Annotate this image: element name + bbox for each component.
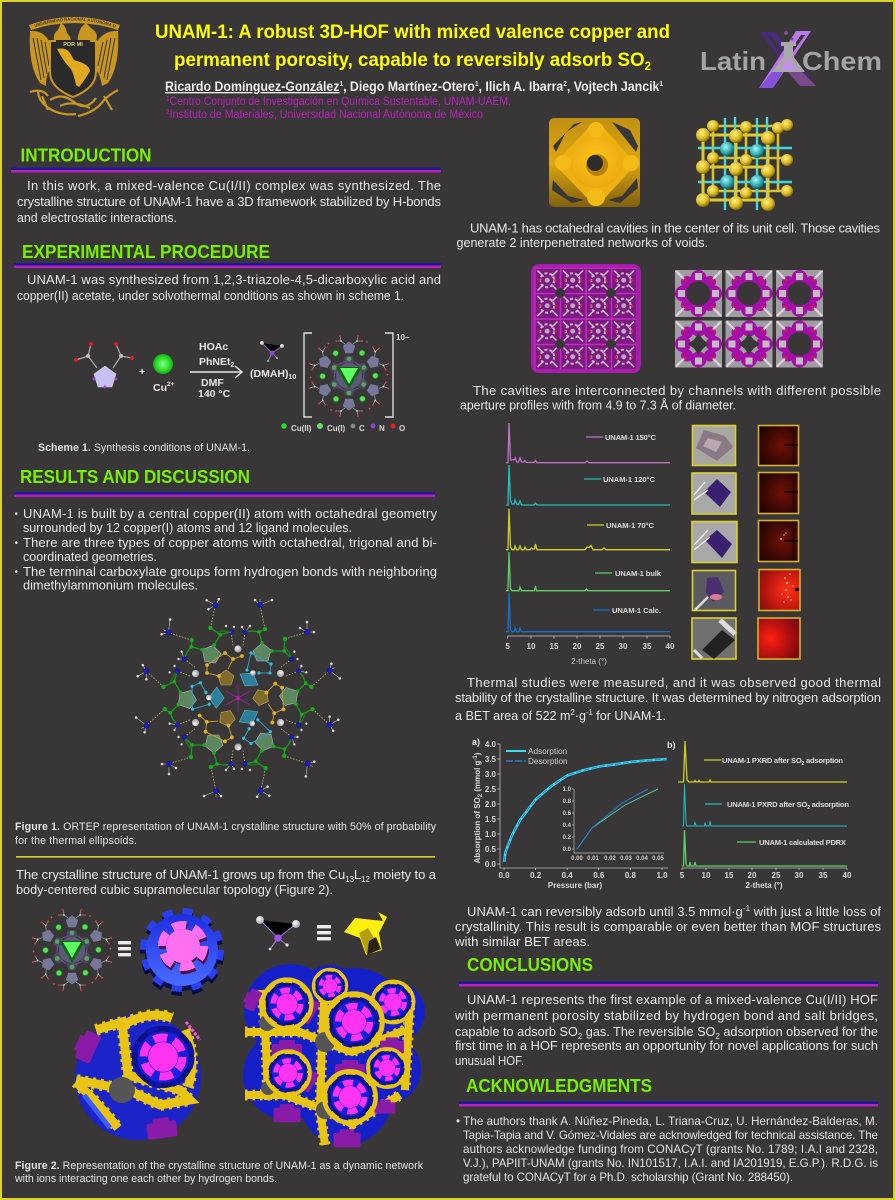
- heading: results: RESULTS AND DISCUSSION: [20, 467, 250, 487]
- arrow with conditions: 140 °C: [198, 388, 231, 400]
- text: thermal studies: a BET area of 522 m: [455, 708, 575, 723]
- axes: 0.0: [485, 860, 497, 869]
- inset chart: 0.6: [563, 811, 572, 817]
- x axis: 2-theta (°): [571, 657, 607, 666]
- axes: 0.5: [485, 845, 497, 854]
- figure 2: [27, 909, 425, 1147]
- axes: 0.6: [593, 871, 605, 880]
- text: thermal studies: Thermal studies were measured, and it was observed good thermal: [467, 675, 881, 690]
- icon: blue gear: [145, 913, 219, 991]
- axes: 0.4: [562, 871, 573, 880]
- x axis: 10: [527, 642, 536, 651]
- authors: 1: [475, 81, 479, 88]
- authors: 1: [340, 81, 343, 88]
- label: Cu2+: 2+: [167, 381, 175, 388]
- axes: 2.5: [485, 785, 497, 794]
- images: diffraction frames: [758, 426, 800, 659]
- inset chart: 0.0: [563, 847, 572, 853]
- scheme 1: [74, 333, 410, 433]
- text: thermal studies: stability of the crystalline structure. It was determined by nitrogen adsorption: [455, 690, 881, 705]
- text: introduction: [17, 178, 442, 225]
- chart a: SO2 adsorption isotherm: [472, 737, 668, 890]
- text: topology: 12: [361, 875, 370, 884]
- title: permanent porosity, capable to reversibly adsorb SO: [174, 49, 663, 71]
- text: results bullets: The terminal carboxylate groups form hydrogen bonds with neighboring: [23, 564, 437, 579]
- text: conclusions: 2: [715, 1032, 720, 1041]
- text: experimental: UNAM-1 was synthesized from 1,2,3-triazole-4,5-dicarboxylic acid and: [27, 272, 441, 287]
- axis: 10: [702, 871, 711, 880]
- axes: 3.5: [485, 755, 497, 764]
- x axis: 40: [666, 642, 675, 651]
- text: reversible adsorption: with similar BET areas.: [454, 934, 590, 949]
- text: reversible adsorption: [454, 904, 882, 949]
- text: results bullets: There are three types of copper atoms with octahedral, trigonal and bi-: [23, 535, 437, 550]
- caption: scheme 1: Scheme 1. Synthesis conditions of UNAM-1.: [38, 442, 250, 454]
- text: acknowledgments: • The authors thank A. Núñez-Pineda, L. Triana-Cruz, U. Hernández-Balderas, M.: [456, 1115, 878, 1128]
- inset chart: [563, 787, 664, 862]
- text: acknowledgments: [456, 1115, 878, 1184]
- caption: figure 1: Figure 1. ORTEP representation of UNAM-1 crystalline structure with 50% of probability: [15, 821, 437, 833]
- image: interpenetrated lattice: [696, 117, 793, 211]
- axis: [680, 868, 852, 890]
- axes: 0.2: [530, 871, 542, 880]
- axes: [473, 740, 668, 890]
- legend: adsorption: Desorption: [528, 757, 568, 766]
- axes: 1.5: [485, 815, 497, 824]
- axes: Absorption of SO: [473, 797, 482, 863]
- rule: [459, 982, 878, 986]
- 3D sphere of gears: [71, 1014, 201, 1140]
- text: channels: aperture profiles with from 4.9 to 7.3 Å of diameter.: [460, 398, 736, 412]
- icon: DMAH molecule: [256, 916, 300, 950]
- axes: 2: [478, 793, 484, 797]
- text: results bullets: •: [14, 567, 18, 578]
- affiliations: 2: [166, 109, 170, 116]
- text: cavities: [456, 220, 880, 250]
- text: acknowledgments: grateful to CONACyT for a Ph.D. scholarship (Grant No. 288450).: [463, 1171, 793, 1184]
- x axis: [505, 636, 675, 666]
- rule: [14, 263, 441, 268]
- title: UNAM-1: A robust 3D-HOF with mixed valence copper and: [155, 21, 670, 43]
- text: thermal studies: for UNAM-1.: [593, 708, 666, 723]
- logo: LatinXChem: [700, 31, 882, 88]
- legend: UNAM-1 PXRD after SO: [722, 756, 802, 765]
- rule: [459, 1102, 878, 1106]
- plus sign: +: [139, 366, 145, 378]
- text: results bullets: UNAM-1 is built by a central copper(II) atom with octahedral geometry: [23, 506, 438, 521]
- text: conclusions: gas. The reversible SO: [582, 1024, 715, 1039]
- image: channels in grey tiles: [675, 270, 823, 368]
- text: channels: The cavities are interconnected by channels with different possible: [473, 383, 881, 398]
- panel: conclusions: [454, 955, 878, 1068]
- x axis: 30: [619, 642, 628, 651]
- text: thermal studies: ·g: [575, 708, 586, 723]
- affiliations: 1: [166, 96, 170, 103]
- chart b: PXRD after SO2: [667, 740, 852, 890]
- caption: figure 1: [15, 821, 437, 847]
- authors: 1: [659, 81, 663, 88]
- rule: [14, 492, 435, 497]
- axes: (mmol g: [473, 760, 482, 794]
- legend: adsorption: Adsorption: [528, 747, 568, 756]
- logo: UNAM shield: POR MI: [63, 42, 83, 48]
- text: conclusions: capable to adsorb SO: [455, 1024, 581, 1039]
- authors: , Ilich A. Ibarra: [479, 79, 564, 94]
- text: results bullets: surrounded by 12 copper(I) atoms and 12 ligand molecules.: [23, 520, 352, 535]
- inset chart: 0.2: [563, 835, 572, 841]
- authors: 2: [563, 81, 567, 88]
- text: conclusions: adsorption observed for the: [720, 1024, 878, 1039]
- heading: conclusions: CONCLUSIONS: [467, 955, 593, 975]
- text: topology: 13: [345, 875, 354, 884]
- panel label a: a): [472, 737, 480, 747]
- x axis: 5: [505, 642, 510, 651]
- text: acknowledgments: authors acknowledge funding from CONACyT (grants No. 1789; I.A.I and 2328,: [463, 1143, 878, 1156]
- figure 1: ORTEP structure: [113, 581, 363, 815]
- inset chart: 0.02: [604, 856, 616, 862]
- axis: 40: [843, 871, 852, 880]
- bracketed cluster: 10−: [396, 333, 410, 342]
- x axis: 25: [596, 642, 605, 651]
- text: results bullets: coordinated geometries.: [23, 549, 157, 564]
- panel label b: b): [667, 740, 676, 750]
- legend: O: [399, 424, 405, 433]
- legend: N: [379, 424, 385, 433]
- text: conclusions: UNAM-1 represents the first example of a mixed-valence Cu(I/II) HOF: [467, 992, 878, 1007]
- text: topology: body-centered cubic supramolecular topology (Figure 2).: [16, 882, 333, 897]
- equals sign: [317, 925, 331, 940]
- images: crystal photographs: [692, 426, 737, 659]
- arrow with conditions: HOAc: [199, 341, 228, 353]
- logo: UNAM shield: [29, 17, 120, 118]
- axes: 4.0: [485, 740, 497, 749]
- axes: 3.0: [485, 770, 497, 779]
- text: cavities: UNAM-1 has octahedral cavities in the center of its unit cell. Those cavities: [470, 220, 880, 236]
- text: reversible adsorption: -1: [743, 904, 751, 913]
- heading: experimental procedure: EXPERIMENTAL PROCEDURE: [22, 242, 270, 262]
- legend: adsorption: [810, 800, 849, 809]
- legend: adsorption: [506, 747, 568, 766]
- axis: 30: [795, 871, 804, 880]
- text: conclusions: first time in a HOF represents an opportunity for novel applications for such: [455, 1038, 878, 1053]
- affiliations: Centro Conjunto de Investigación en Química Sustentable, UNAM-UAEM.: [170, 96, 511, 108]
- chart: PXRD thermal series: [505, 423, 675, 666]
- label: Cu2+: Cu: [153, 382, 167, 394]
- text: introduction: and electrostatic interactions.: [17, 210, 177, 225]
- icon: yellow tripod: [344, 912, 387, 955]
- axes: 0.8: [625, 871, 637, 880]
- icon: triazole ligand: [74, 342, 134, 388]
- axes: 0.0: [498, 871, 510, 880]
- inset chart: 0.8: [563, 799, 572, 805]
- legend: temperatures: [584, 433, 662, 615]
- panel: acknowledgments: [456, 1076, 878, 1184]
- logo: LatinXChem: Chem: [802, 46, 882, 76]
- axis: 20: [748, 871, 757, 880]
- caption: figure 2: [14, 1160, 424, 1185]
- text: experimental: [17, 272, 441, 303]
- legend: Cu(II): [291, 424, 312, 433]
- text: acknowledgments: V.J.), PAPIIT-UNAM (grants No. IN101517, I.A.I. and IA201919, E.G.P.). R.D.G. is: [463, 1157, 878, 1170]
- authors: , Vojtech Jancik: [567, 79, 660, 94]
- legend: adsorption: [804, 756, 843, 765]
- axis: 35: [819, 871, 828, 880]
- axes: 1.0: [485, 830, 497, 839]
- x axis: 20: [573, 642, 582, 651]
- bracketed cluster: [304, 333, 410, 417]
- text: reversible adsorption: with just a little loss of: [750, 904, 881, 919]
- text: introduction: crystalline structure of UNAM-1 have a 3D framework stabilized by H-bonds: [17, 194, 442, 209]
- inset chart: 1.0: [563, 787, 572, 793]
- inset chart: 0.01: [587, 856, 599, 862]
- legend: Cu(I): [327, 424, 346, 433]
- authors: , Diego Martínez-Otero: [343, 79, 475, 94]
- caption: figure 2: Figure 2. Representation of the crystalline structure of UNAM-1 as a dynamic network: [15, 1160, 424, 1172]
- panel: experimental procedure: [14, 242, 441, 454]
- authors: Ricardo Domínguez-González: [165, 79, 340, 94]
- label: DMAH: (DMAH): [250, 368, 288, 380]
- arrow with conditions: DMF: [201, 377, 224, 389]
- divider: [16, 856, 435, 858]
- panel: results and discussion: [14, 467, 438, 1185]
- text: conclusions: [454, 992, 878, 1068]
- axis: 2-theta (°): [746, 881, 783, 890]
- x axis: 15: [550, 642, 559, 651]
- inset chart: 0.04: [636, 856, 648, 862]
- panel: introduction: [11, 146, 442, 225]
- text: introduction: In this work, a mixed-valence Cu(I/II) complex was synthesized. The: [27, 178, 441, 193]
- legend: temperatures: UNAM-1 150°C: [605, 433, 657, 442]
- text: topology: The crystalline structure of UNAM-1 grows up from the Cu: [16, 867, 345, 882]
- axes: -1: [473, 755, 479, 761]
- axis: 5: [680, 871, 685, 880]
- header: [29, 17, 882, 121]
- inset chart: 0.4: [563, 823, 572, 829]
- legend: temperatures: UNAM-1 Calc.: [612, 606, 661, 615]
- legend: 2: [802, 761, 805, 767]
- equals sign: [118, 941, 131, 956]
- text: topology: [16, 867, 437, 897]
- text: conclusions: 2: [578, 1032, 583, 1041]
- legend: 2: [807, 805, 810, 811]
- text: cavities: generate 2 interpenetrated networks of voids.: [456, 235, 708, 250]
- axis: 25: [772, 871, 781, 880]
- title: [155, 21, 670, 73]
- text: results bullets: [14, 506, 438, 592]
- legend: UNAM-1 calculated PDRX: [759, 838, 846, 847]
- text: reversible adsorption: crystallinity. This result is comparable or even better than MOF structures: [455, 919, 882, 934]
- text: results bullets: •: [14, 509, 18, 520]
- text: results bullets: •: [14, 538, 18, 549]
- legend: [281, 423, 405, 433]
- inset chart: 0.05: [652, 856, 664, 862]
- legend: [704, 756, 849, 847]
- image: magenta network: [531, 264, 641, 373]
- axes: 2.0: [485, 800, 497, 809]
- text: topology: moiety to a: [370, 867, 437, 882]
- arrow with conditions: [190, 341, 242, 400]
- legend: C: [359, 424, 365, 433]
- text: experimental: copper(II) acetate, under solvothermal conditions as shown in scheme 1.: [17, 288, 404, 303]
- text: thermal studies: -1: [586, 708, 593, 717]
- label: DMAH: 10: [288, 374, 296, 381]
- legend: temperatures: UNAM-1 70°C: [606, 521, 655, 530]
- icon: cluster small: [27, 909, 117, 991]
- text: channels: [460, 383, 881, 412]
- axes: ): [473, 752, 482, 755]
- text: acknowledgments: Tapia-Tapia and V. Gómez-Vidales are acknowledged for technical assistance. The: [463, 1129, 878, 1142]
- rule: [11, 168, 441, 172]
- legend: UNAM-1 PXRD after SO: [727, 800, 807, 809]
- panel: right column: [454, 117, 882, 1184]
- arrow with conditions: 2: [230, 362, 234, 369]
- text: topology: L: [354, 867, 361, 882]
- text: conclusions: with permanent porosity stabilized by hydrogen bond and salt bridges,: [454, 1008, 878, 1023]
- affiliations: [166, 96, 511, 121]
- axis: 15: [725, 871, 734, 880]
- text: thermal studies: [455, 675, 881, 723]
- arrow with conditions: PhNEt: [199, 356, 230, 368]
- heading: acknowledgments: ACKNOWLEDGMENTS: [466, 1076, 652, 1096]
- x axis: 35: [643, 642, 652, 651]
- legend: temperatures: UNAM-1 120°C: [603, 475, 656, 484]
- text: conclusions: unusual HOF.: [455, 1053, 524, 1068]
- caption: figure 1: for the thermal ellipsoids.: [15, 835, 137, 847]
- axes: Pressure (bar): [548, 881, 602, 890]
- icon: Cu2+ sphere: [153, 354, 173, 374]
- image: gold void surface: [549, 118, 640, 207]
- text: results bullets: dimethylammonium molecules.: [23, 578, 198, 592]
- axes: 1.0: [656, 871, 668, 880]
- text: thermal studies: 2: [571, 708, 575, 717]
- legend: temperatures: UNAM-1 bulk: [615, 569, 662, 578]
- inset chart: 0.03: [620, 856, 632, 862]
- caption: figure 2: with ions interacting one each other by hydrogen bonds.: [14, 1173, 277, 1185]
- heading: introduction: INTRODUCTION: [20, 146, 152, 166]
- title: 2: [645, 59, 651, 73]
- 3D network of gears: [241, 964, 425, 1147]
- inset chart: 0.00: [571, 856, 583, 862]
- authors: [165, 79, 663, 94]
- text: reversible adsorption: UNAM-1 can reversibly adsorb until 3.5 mmol·g: [467, 904, 743, 919]
- isotherm curves: [504, 759, 667, 862]
- logo: LatinXChem: Latin: [700, 46, 766, 76]
- affiliations: Instituto de Materiales, Universidad Nacional Autónoma de México: [170, 109, 483, 121]
- icon: DMAH cation: [260, 341, 284, 362]
